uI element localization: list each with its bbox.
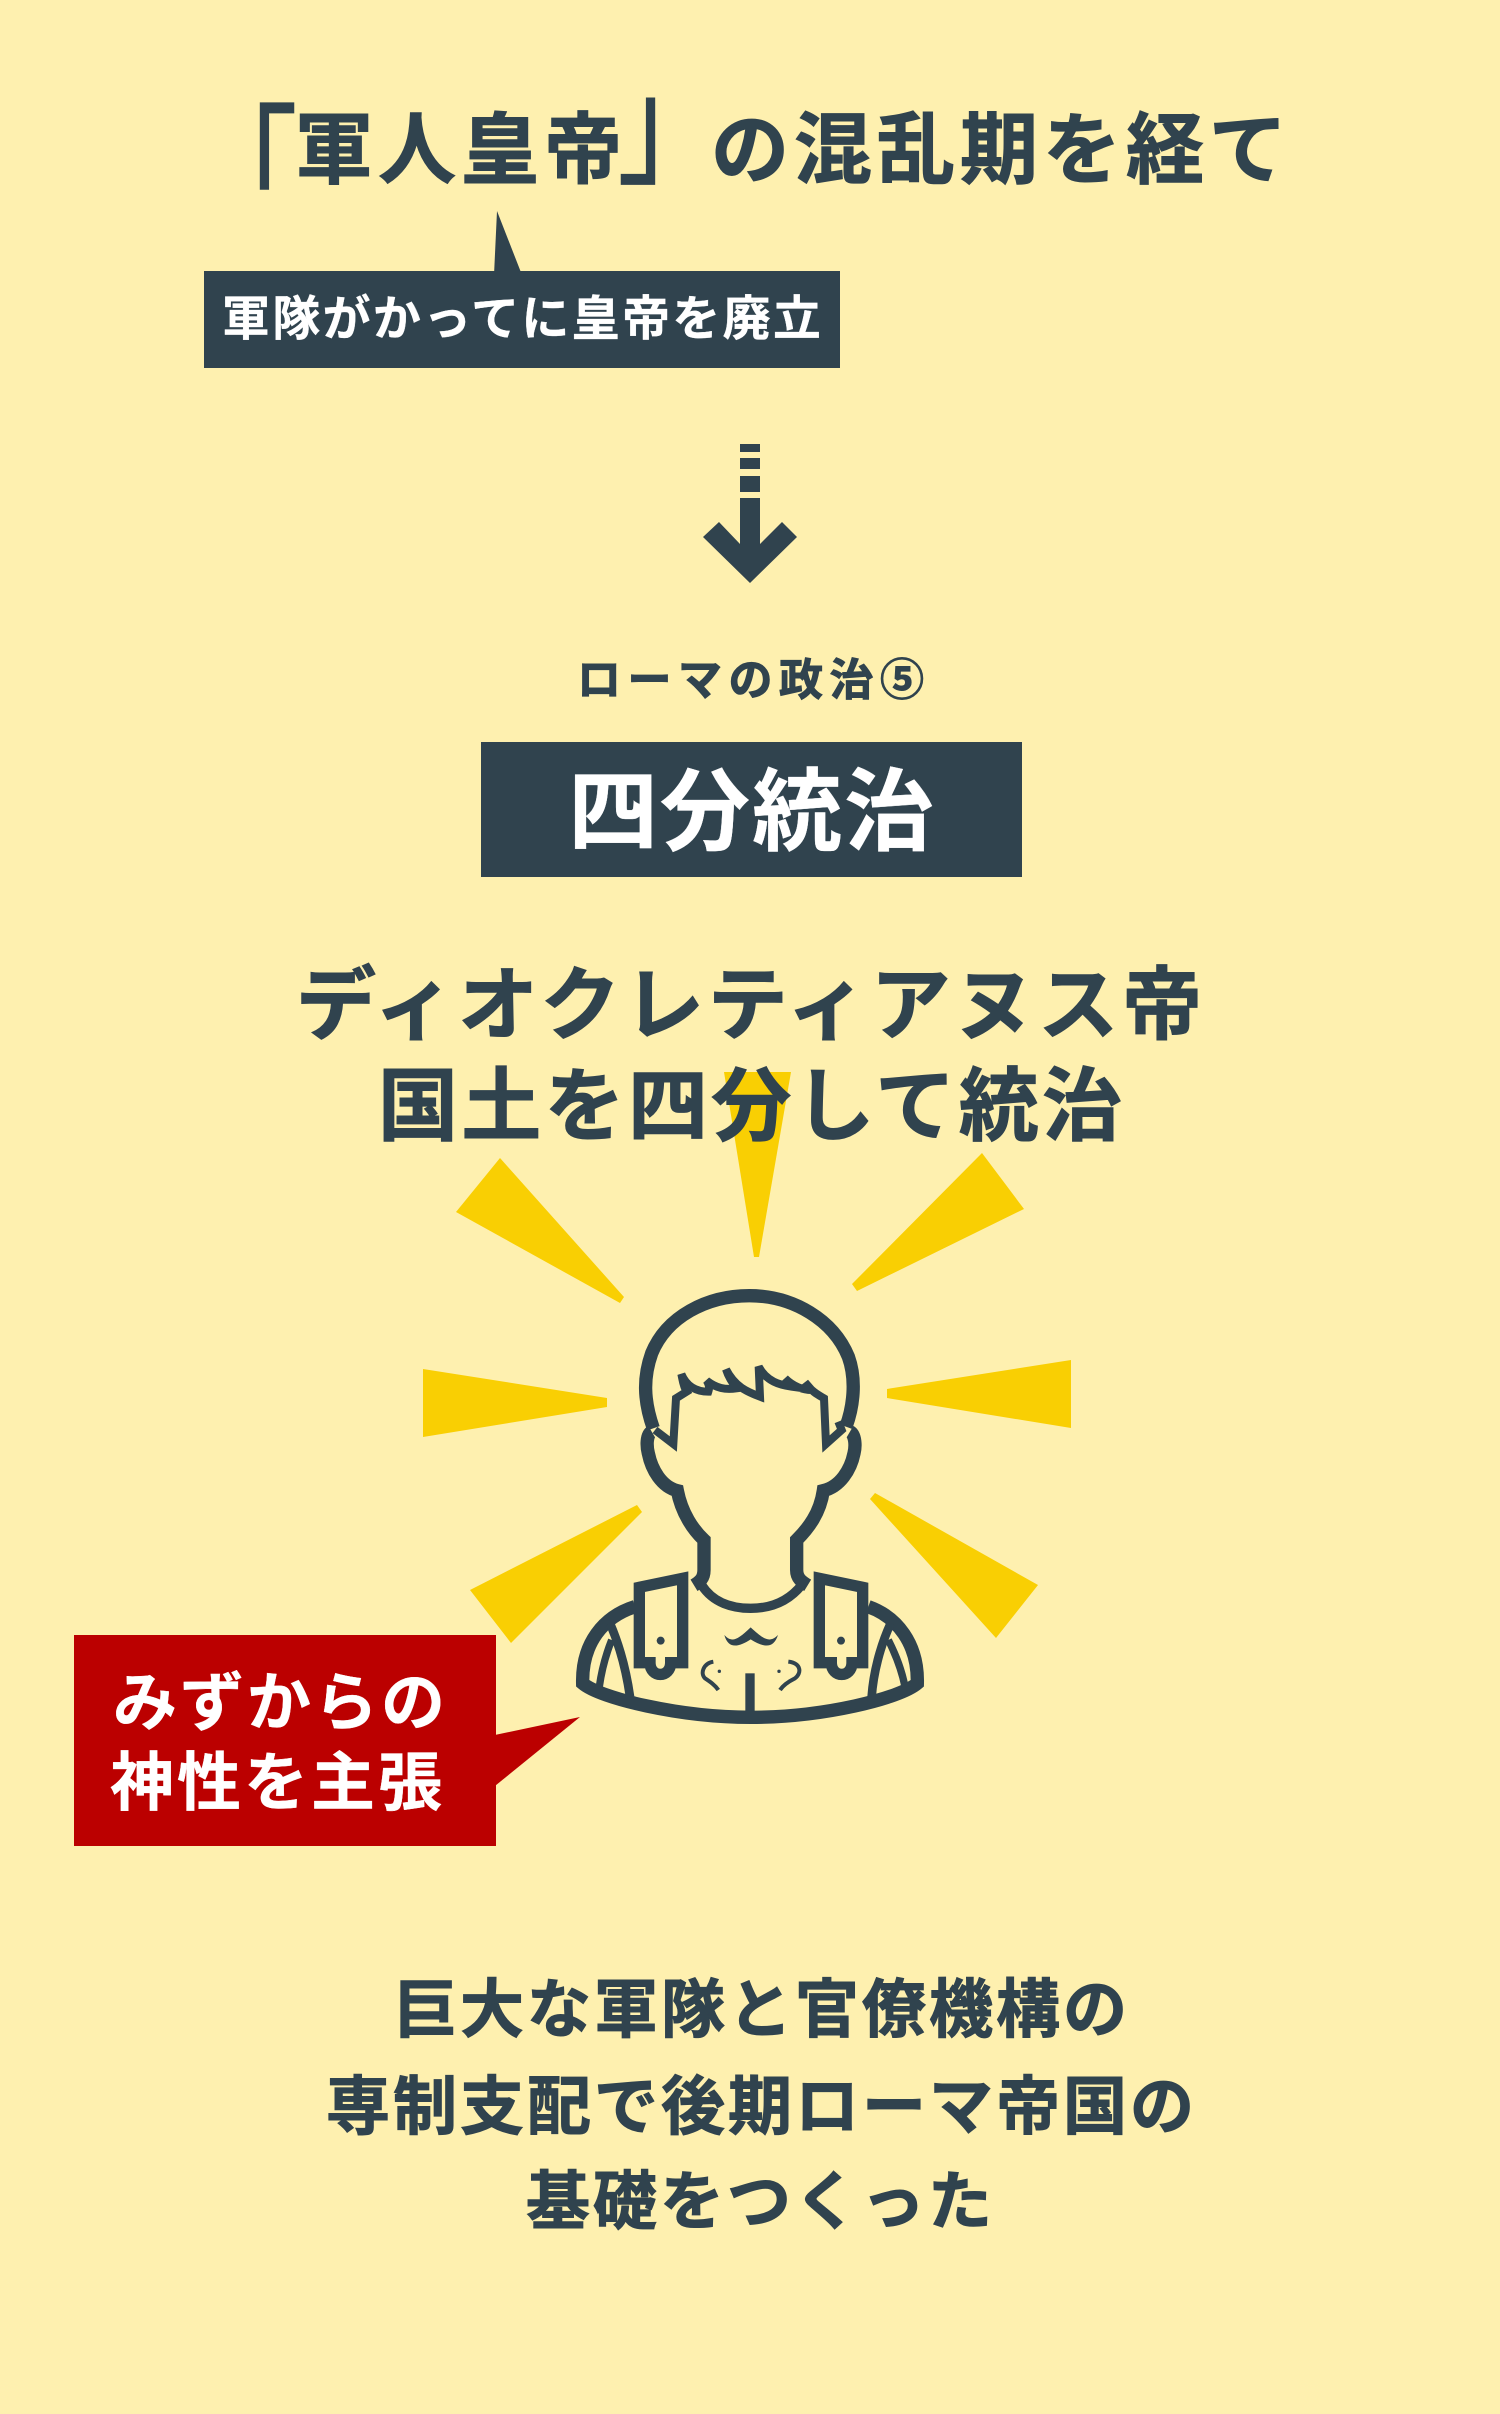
callout: army deposes emperors xyxy=(204,211,840,368)
arrow: dashed down arrow xyxy=(703,444,797,583)
title: 「 xyxy=(193,96,297,244)
callout: army deposes emperors: 軍隊がかってに皇帝を廃立 xyxy=(222,293,823,346)
title: 軍人皇帝 xyxy=(295,106,627,194)
callout: claims divinity: みずからの xyxy=(113,1667,448,1739)
text block: Diocletian divides the land xyxy=(296,961,1206,1151)
heading box: tetrarchy: 四分統治 xyxy=(568,763,936,863)
text block: Diocletian divides the land: 国土を四分して統治 xyxy=(378,1062,1125,1151)
text block: conclusion: 専制支配で後期ローマ帝国の xyxy=(326,2071,1197,2143)
subheading: ローマの政治⑤ xyxy=(577,656,930,705)
text block: conclusion: 巨大な軍隊と官僚機構の xyxy=(393,1974,1130,2046)
text block: conclusion: 基礎をつくった xyxy=(526,2166,995,2238)
title xyxy=(193,54,1292,244)
callout: claims divinity xyxy=(74,1635,580,1846)
text block: conclusion xyxy=(326,1974,1197,2238)
icon: emperor bust xyxy=(583,1296,917,1717)
callout: claims divinity: 神性を主張 xyxy=(110,1747,445,1819)
radiating yellow rays xyxy=(423,1072,1071,1643)
text block: Diocletian divides the land: ディオクレティアヌス帝 xyxy=(296,961,1206,1050)
title: の混乱期を経て xyxy=(711,106,1292,194)
title: 」 xyxy=(618,54,722,201)
heading box: tetrarchy xyxy=(481,742,1022,877)
